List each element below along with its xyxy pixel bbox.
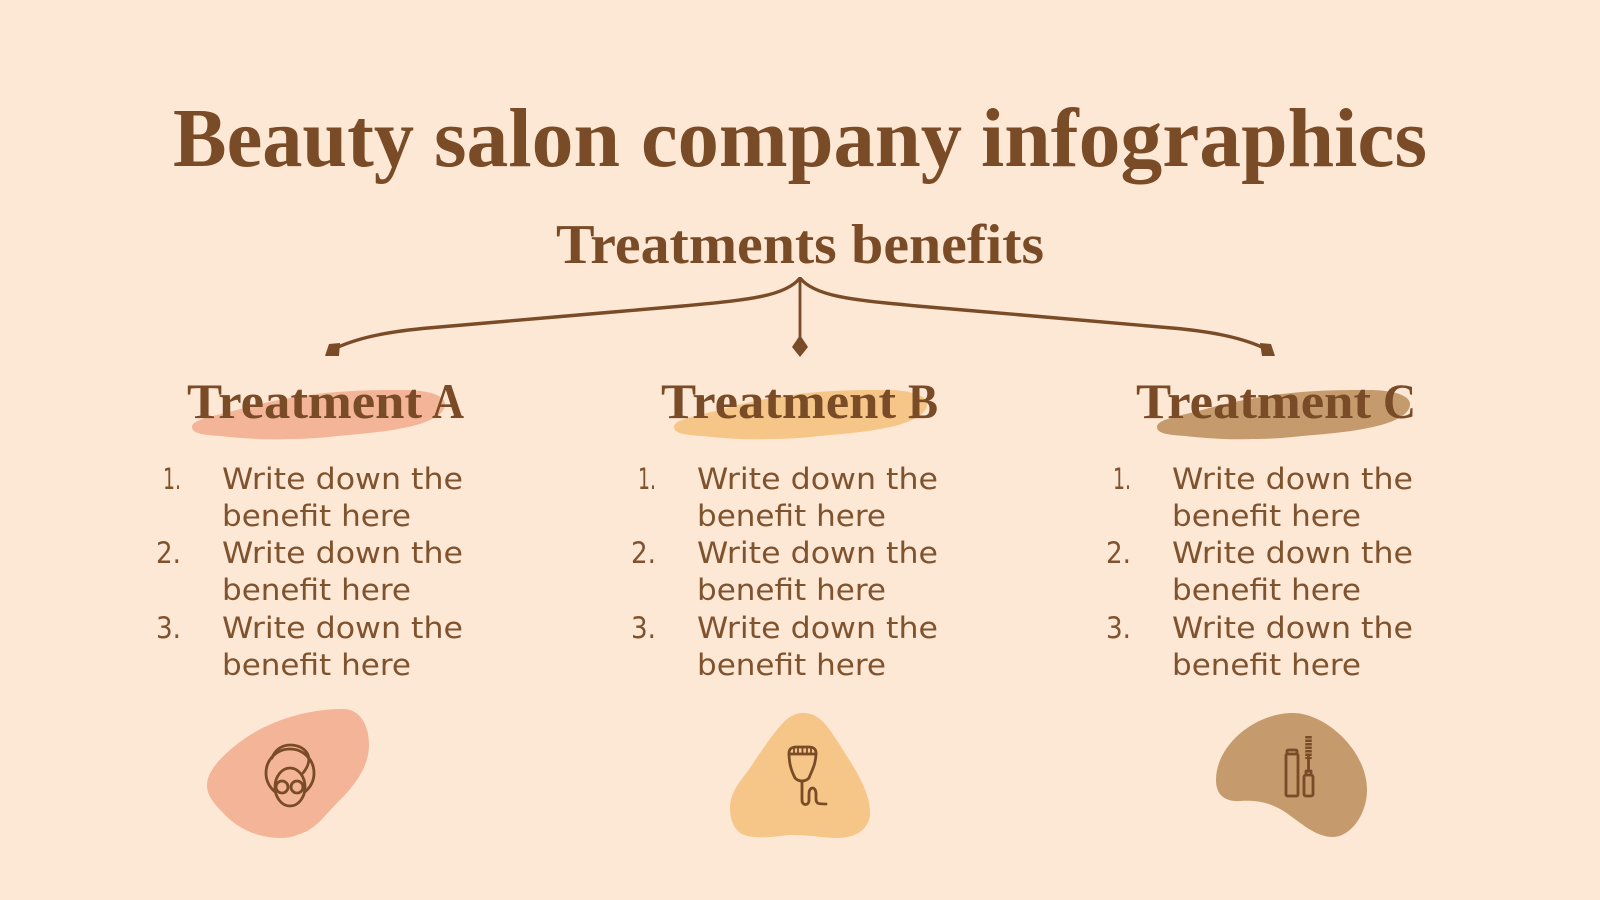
column: Treatment A	[156, 373, 464, 838]
subtitle: Treatments benefits: Treatments benefits	[556, 214, 1044, 276]
title: infographics	[981, 92, 1427, 185]
numbered list A: benefit here	[222, 648, 411, 682]
numbered list C: 3.	[1106, 611, 1131, 645]
numbered list B: Write down the	[697, 462, 938, 496]
blob C	[1216, 713, 1367, 837]
numbered list A: Write down the	[222, 536, 463, 570]
heading: Treatment B: Treatment	[661, 373, 896, 429]
title	[173, 92, 1427, 185]
numbered list C: benefit here	[1172, 573, 1361, 607]
heading: Treatment C: C	[1383, 373, 1416, 429]
title: Beauty	[173, 92, 414, 185]
column: Treatment C	[1106, 373, 1416, 837]
numbered list A: benefit here	[222, 573, 411, 607]
numbered list B	[631, 462, 938, 682]
numbered list A: benefit here	[222, 499, 411, 533]
heading: Treatment C: Treatment	[1136, 373, 1371, 429]
blob A	[207, 709, 369, 838]
numbered list C: Write down the	[1172, 611, 1413, 645]
column: Treatment B	[631, 373, 938, 838]
numbered list A: Write down the	[222, 462, 463, 496]
numbered list C	[1106, 462, 1413, 682]
numbered list A: 2.	[156, 536, 181, 570]
numbered list C: 2.	[1106, 536, 1131, 570]
heading: Treatment C	[1136, 385, 1412, 418]
numbered list B: Write down the	[697, 611, 938, 645]
numbered list B: benefit here	[697, 499, 886, 533]
numbered list C: Write down the	[1172, 536, 1413, 570]
title: salon	[434, 92, 620, 185]
icon: epilator	[789, 747, 826, 804]
numbered list B: Write down the	[697, 536, 938, 570]
title: company	[641, 92, 962, 185]
icon: mascara	[1286, 736, 1313, 796]
numbered list B: 2.	[631, 536, 656, 570]
heading: Treatment A: A	[432, 373, 464, 429]
numbered list A: Write down the	[222, 611, 463, 645]
numbered list B: benefit here	[697, 573, 886, 607]
numbered list A: 3.	[156, 611, 181, 645]
numbered list C: benefit here	[1172, 648, 1361, 682]
blob B	[730, 713, 870, 838]
numbered list B: 3.	[631, 611, 656, 645]
numbered list B: 1.	[638, 462, 656, 496]
highlight swash C	[1157, 390, 1410, 439]
highlight swash B	[674, 390, 927, 439]
numbered list C: Write down the	[1172, 462, 1413, 496]
highlight swash A	[192, 390, 445, 439]
heading: Treatment B: B	[908, 373, 938, 429]
numbered list C: benefit here	[1172, 499, 1361, 533]
icon: face mask	[266, 745, 314, 806]
numbered list A	[156, 462, 463, 682]
heading: Treatment A: Treatment	[187, 373, 422, 429]
numbered list B: benefit here	[697, 648, 886, 682]
connector: branching bracket	[325, 277, 1275, 357]
numbered list C: 1.	[1113, 462, 1131, 496]
numbered list A: 1.	[163, 462, 181, 496]
